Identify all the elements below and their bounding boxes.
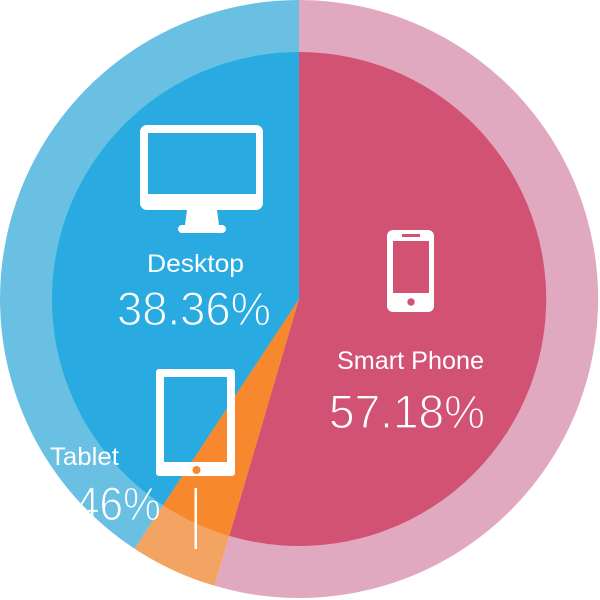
icon: desktop monitor <box>140 125 263 233</box>
tablet percentage: 4.46% <box>40 477 161 530</box>
label: smart phone <box>329 347 485 438</box>
inner slice: tablet <box>163 299 299 536</box>
inner slice: desktop <box>52 52 299 505</box>
smart phone name: Smart Phone <box>337 347 484 375</box>
desktop name: Desktop <box>147 250 244 278</box>
outer ring: tablet <box>134 299 299 586</box>
icon: smart phone <box>387 230 434 312</box>
smart phone percentage: 57.18% <box>329 385 485 438</box>
icon: tablet <box>156 369 235 476</box>
tablet leader line <box>194 488 197 549</box>
outer ring: smart phone <box>215 0 598 598</box>
outer ring: desktop <box>0 0 299 549</box>
desktop percentage: 38.36% <box>117 282 271 335</box>
tablet name: Tablet <box>50 443 119 471</box>
label: tablet <box>40 443 161 530</box>
label: desktop <box>117 250 271 335</box>
inner slice: smart phone <box>229 52 546 546</box>
